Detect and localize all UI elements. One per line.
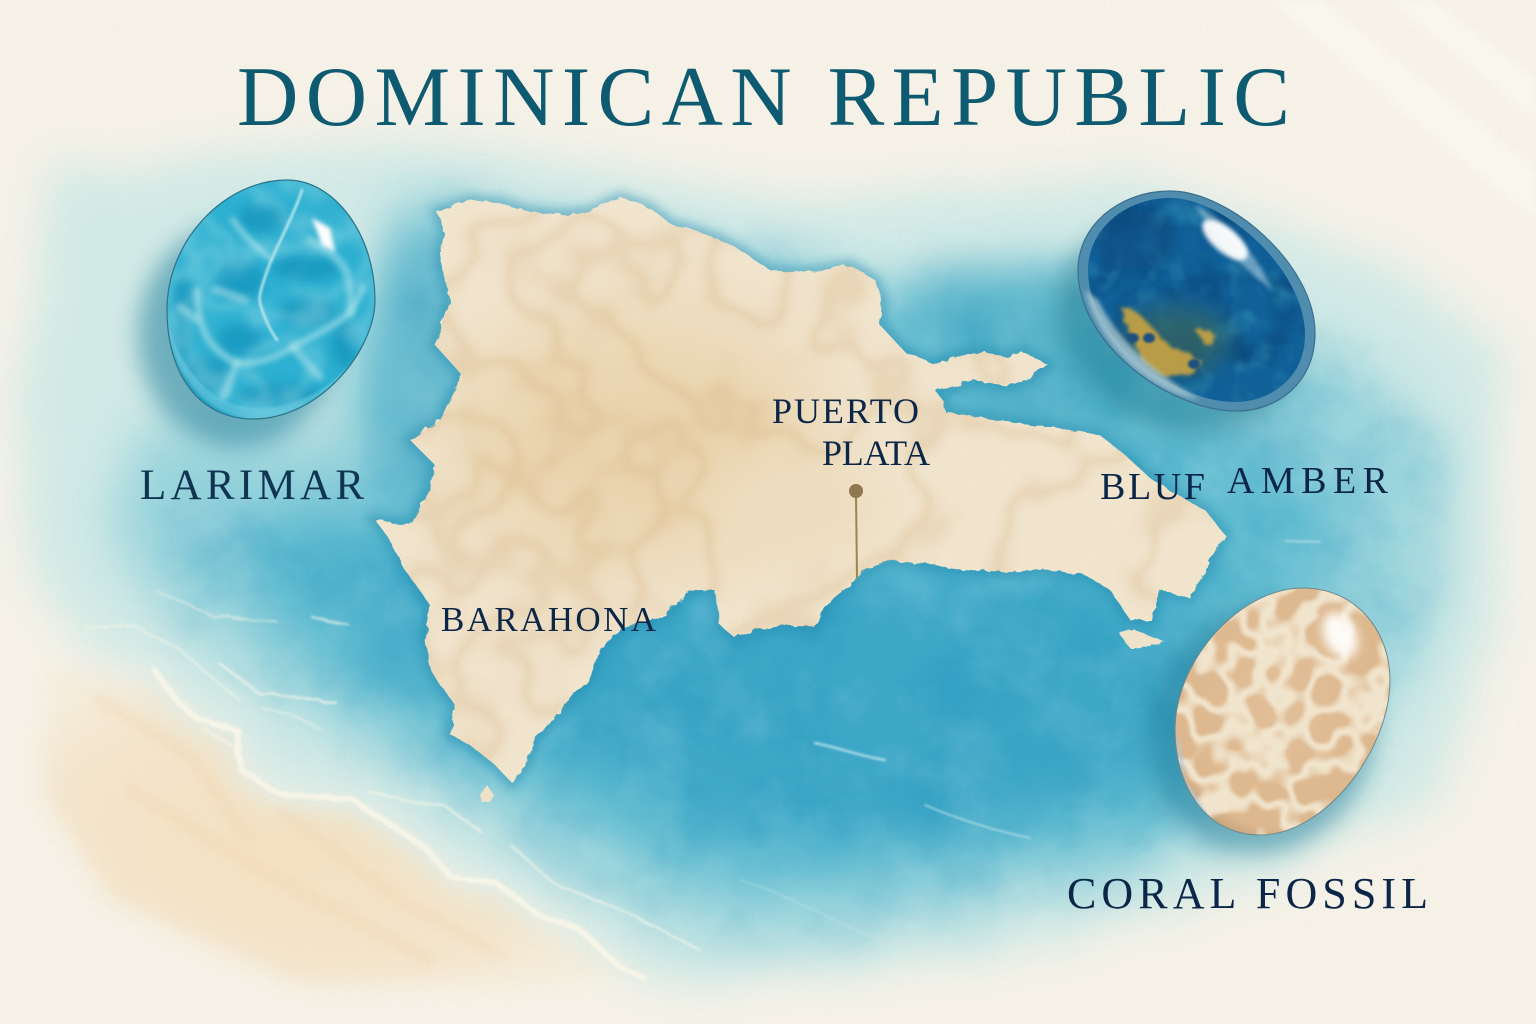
- sea pigment mottling: [161, 178, 1450, 956]
- label: Blue Amber: [1100, 460, 1389, 508]
- label: Puerto Plata: PLATA: [822, 433, 930, 473]
- title: DOMINICAN REPUBLIC: [237, 50, 1290, 144]
- map small islands: [1118, 630, 1165, 648]
- sand beach: [40, 665, 620, 985]
- sun rays: [1270, 0, 1536, 220]
- label: Barahona: BARAHONA: [441, 600, 657, 639]
- map parchment stains: [405, 211, 1210, 762]
- stone: Blue Amber: [1044, 190, 1316, 446]
- label: Blue Amber: AMBER: [1227, 460, 1389, 502]
- map: Dominican Republic landmass: [370, 190, 1240, 802]
- pin marker: Puerto Plata: [849, 484, 863, 578]
- stone: Larimar: [138, 175, 385, 447]
- label: Coral Fossil: CORAL FOSSIL: [1067, 869, 1428, 918]
- ocean foam at shoreline: [85, 590, 700, 977]
- label: Puerto Plata: PUERTO: [772, 391, 919, 431]
- label: Blue Amber: BLUF: [1100, 466, 1205, 508]
- label: Larimar: LARIMAR: [140, 462, 364, 509]
- map body: [375, 197, 1225, 783]
- stone: Coral Fossil: [1143, 588, 1390, 870]
- small sea wave highlights: [740, 541, 1320, 940]
- label: Puerto Plata: [772, 391, 930, 473]
